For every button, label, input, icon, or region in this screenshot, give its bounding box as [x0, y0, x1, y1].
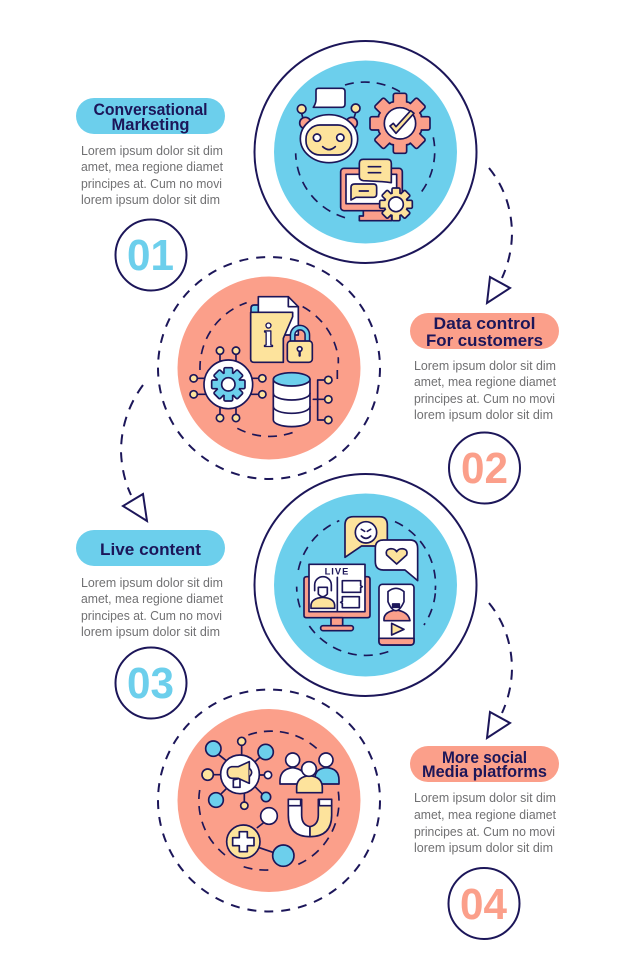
icon: data folder, lock, gear and database: i [264, 318, 273, 355]
heading pill [76, 98, 225, 134]
step 4 circle [158, 690, 380, 912]
arrow: step 3 to step 4 [487, 603, 512, 738]
heading pill: Data control [434, 315, 536, 333]
heading pill: For customers [426, 332, 543, 350]
body text: principes at. Cum no movi [81, 608, 222, 623]
heading pill [410, 313, 559, 350]
body text: principes at. Cum no movi [414, 391, 555, 406]
body text: principes at. Cum no movi [414, 824, 555, 839]
body text: lorem ipsum dolor sit dim [414, 840, 553, 855]
number 02: 02 [461, 444, 508, 493]
icon: live stream monitor, phone and reaction bubbles: LIVE [325, 566, 349, 576]
number 01 [116, 220, 186, 290]
body text: amet, mea regione diamet [81, 591, 223, 606]
body text: amet, mea regione diamet [414, 374, 556, 389]
body text: amet, mea regione diamet [414, 807, 556, 822]
body text [414, 358, 556, 422]
icon: data folder, lock, gear and database [190, 297, 338, 436]
body text: lorem ipsum dolor sit dim [81, 624, 220, 639]
number 03: 03 [127, 659, 174, 708]
body text: lorem ipsum dolor sit dim [414, 407, 553, 422]
body text: Lorem ipsum dolor sit dim [81, 143, 223, 158]
body text: Lorem ipsum dolor sit dim [414, 790, 556, 805]
number 02 [449, 432, 520, 504]
body text [81, 575, 223, 639]
number 04: 04 [460, 880, 507, 929]
heading pill [410, 746, 559, 782]
number 04 [448, 868, 520, 939]
number 03 [116, 648, 186, 718]
arrow: step 1 to step 2 [487, 168, 512, 303]
block 3: Live content [76, 530, 225, 718]
icon: robot, gear and monitor [296, 82, 435, 221]
heading pill: Live content [100, 541, 202, 559]
step 1 circle [254, 41, 476, 263]
heading pill [76, 530, 225, 566]
step 3 circle [254, 474, 476, 696]
block 1: Conversational Marketing [76, 98, 225, 290]
heading pill: Conversational [94, 101, 208, 119]
body text [81, 143, 223, 207]
block 2: Data control For customers [410, 313, 559, 504]
icon: live stream monitor, phone and reaction bubbles [297, 517, 436, 655]
body text: principes at. Cum no movi [81, 176, 222, 191]
arrow: step 2 to step 3 [121, 385, 147, 521]
heading pill: Media platforms [422, 763, 547, 781]
body text: Lorem ipsum dolor sit dim [81, 575, 223, 590]
body text: Lorem ipsum dolor sit dim [414, 358, 556, 373]
heading pill: Marketing [112, 116, 190, 134]
icon: social network, audience and magnet [199, 731, 339, 870]
number 01: 01 [127, 231, 174, 280]
body text: lorem ipsum dolor sit dim [81, 192, 220, 207]
body text: amet, mea regione diamet [81, 159, 223, 174]
step 2 circle [158, 257, 380, 479]
heading pill: More social [442, 749, 527, 767]
body text [414, 790, 556, 855]
block 4: More social Media platforms [410, 746, 559, 939]
